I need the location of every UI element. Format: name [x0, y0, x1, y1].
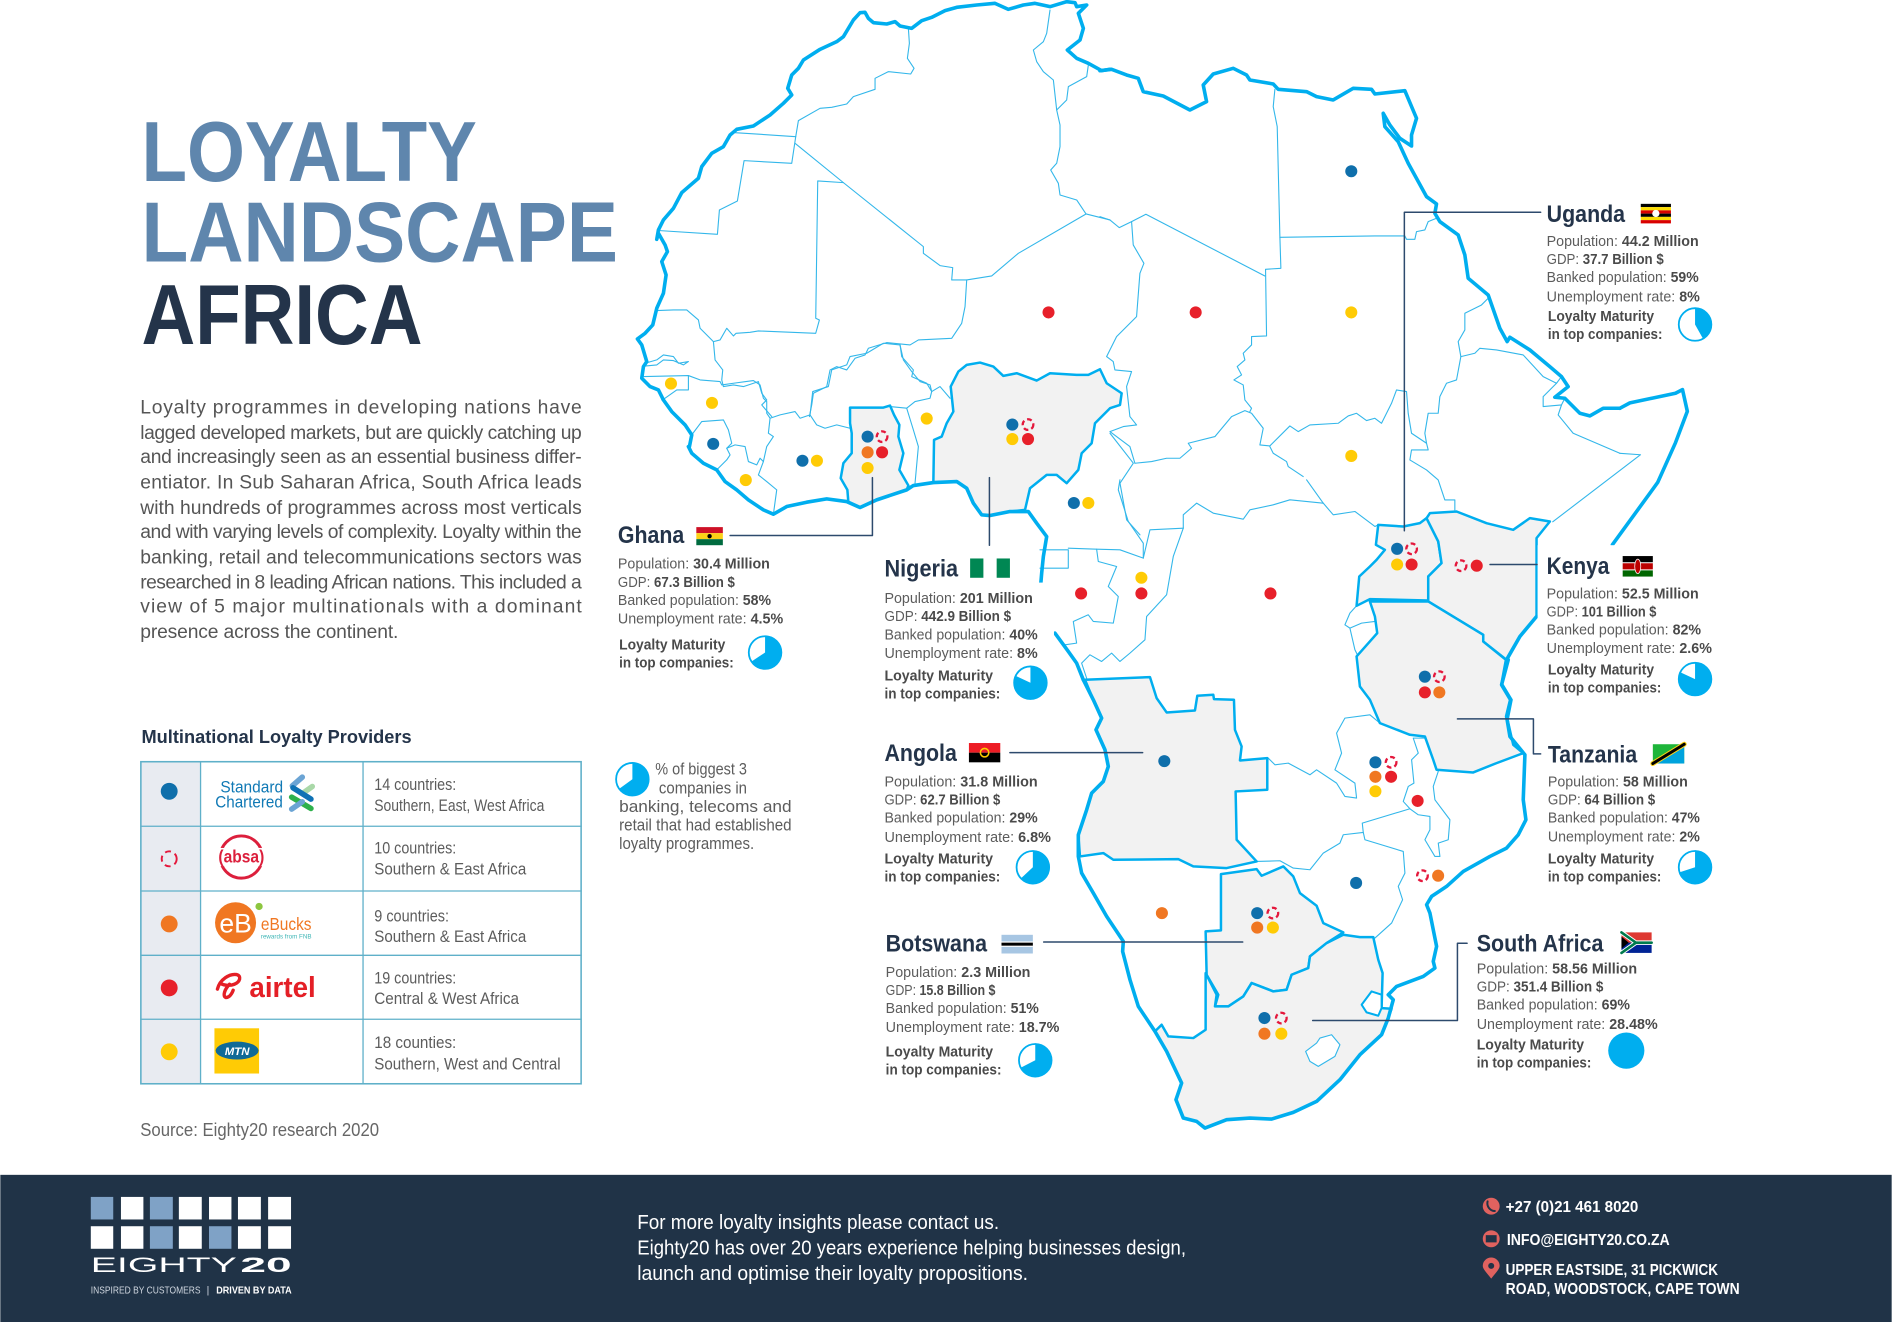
flag: Ghana [696, 527, 723, 545]
Ghana statistics: Population: 30.4 Million [618, 556, 770, 573]
logo: MTN [214, 1028, 259, 1074]
South Africa statistics [1477, 960, 1658, 1033]
logo: Standard Chartered [215, 777, 312, 812]
South Africa pie [1608, 1033, 1644, 1069]
title: LOYALTY [141, 104, 477, 200]
Kenya maturity label [1548, 661, 1661, 696]
Botswana maturity label: Loyalty Maturity [886, 1044, 994, 1061]
Botswana statistics: Banked population: 51% [886, 1000, 1039, 1017]
pie legend: retail that had established [619, 816, 792, 834]
key: eBucks dot [161, 916, 178, 932]
highlighted countries: Uganda, Kenya, Tanzania [1357, 511, 1550, 772]
Tanzania maturity label: Loyalty Maturity [1548, 851, 1655, 868]
providers table [141, 762, 581, 1084]
Ghana statistics: Unemployment rate: 4.5% [618, 611, 783, 628]
contact: address: UPPER EASTSIDE, 31 PICKWICK [1506, 1262, 1719, 1279]
logo: Absa: (absa) [218, 846, 264, 866]
table text: Central & West Africa [374, 990, 520, 1008]
Kenya statistics: GDP: 101 Billion $ [1547, 603, 1657, 620]
South Africa maturity label [1477, 1036, 1591, 1071]
Uganda statistics: Banked population: 59% [1547, 269, 1699, 286]
Ghana statistics [618, 556, 783, 628]
map of Africa [637, 2, 1731, 1128]
Kenya statistics [1547, 585, 1712, 657]
flag: Botswana [1001, 935, 1033, 954]
Nigeria statistics: Population: 201 Million [884, 590, 1033, 607]
title [141, 104, 618, 363]
Airtel markers [876, 306, 1483, 807]
panel: Uganda: Uganda [1547, 201, 1626, 228]
coastline: Mediterranean and Red Sea [1100, 68, 1620, 416]
flag: Angola [969, 743, 1000, 762]
contact: phone: +27 (0)21 461 8020 [1506, 1199, 1639, 1216]
Tanzania statistics: Unemployment rate: 2% [1548, 828, 1700, 845]
table text: 18 counties: [374, 1034, 456, 1052]
Uganda maturity label: in top companies: [1548, 326, 1662, 343]
source: Source: Eighty20 research 2020 [140, 1120, 379, 1140]
highlighted countries: Ghana and Nigeria [841, 363, 1122, 516]
coastline: Horn of Africa [1612, 390, 1687, 545]
flag: Nigeria [970, 558, 1010, 578]
panel: Angola: Angola [884, 740, 957, 767]
provider markers on the map [665, 165, 1483, 1040]
Uganda pie [1679, 308, 1712, 341]
footer message [637, 1212, 1186, 1285]
thin border: Somalia and Ethiopia [1553, 453, 1641, 522]
Ghana statistics: GDP: 67.3 Billion $ [618, 574, 735, 591]
contact: address [1506, 1262, 1740, 1298]
key: Airtel dot [161, 979, 178, 996]
intro paragraph: and with varying levels of complexity. Loyalty within the [140, 522, 582, 543]
Uganda statistics: Population: 44.2 Million [1547, 233, 1699, 250]
footer message: launch and optimise their loyalty propositions. [637, 1263, 1028, 1285]
panel: South Africa: South Africa [1477, 931, 1604, 958]
Botswana maturity label [886, 1044, 1001, 1079]
logo: Absa [215, 836, 268, 878]
highlighted countries: Angola, Botswana, South Africa [1078, 677, 1392, 1128]
Tanzania maturity label [1548, 851, 1661, 886]
pie legend: % of biggest 3 [655, 760, 747, 778]
panel: Botswana [886, 931, 1243, 1079]
logo: eBucks: rewards from FNB [261, 933, 312, 940]
South Africa statistics: Unemployment rate: 28.48% [1477, 1016, 1658, 1033]
table text: Southern & East Africa [374, 860, 527, 878]
South Africa statistics: Banked population: 69% [1477, 997, 1630, 1014]
white label backgrounds clipping the coast [884, 545, 1731, 715]
Nigeria maturity label: in top companies: [884, 685, 1000, 702]
thin borders: north-west [657, 10, 1110, 417]
table text [374, 776, 561, 1073]
Uganda statistics: GDP: 37.7 Billion $ [1547, 251, 1664, 268]
logo: Eighty20: DRIVEN BY DATA [216, 1286, 292, 1297]
coastline: Gabon to Angola [1055, 633, 1083, 680]
Kenya statistics: Unemployment rate: 2.6% [1547, 640, 1712, 657]
South Africa statistics: Population: 58.56 Million [1477, 960, 1637, 977]
contact: address: ROAD, WOODSTOCK, CAPE TOWN [1506, 1281, 1740, 1298]
Ghana maturity label [619, 637, 734, 672]
Absa markers [877, 419, 1466, 1023]
thin borders: West Africa [644, 343, 1140, 535]
panel: Ghana [618, 478, 872, 672]
logo: eBucks: eB [219, 908, 252, 938]
Nigeria statistics: Banked population: 40% [884, 626, 1038, 643]
flag: South Africa [1621, 932, 1652, 953]
icon: email [1483, 1230, 1500, 1247]
icon: location pin [1483, 1257, 1500, 1279]
Nigeria maturity label [884, 667, 1000, 702]
thin borders: north-east [1100, 89, 1620, 510]
pie legend: banking, telecoms and [619, 798, 792, 816]
footer message: For more loyalty insights please contact us. [637, 1212, 999, 1234]
Angola maturity label: Loyalty Maturity [884, 851, 994, 868]
panel: Tanzania [1457, 719, 1712, 886]
Tanzania statistics: GDP: 64 Billion $ [1548, 792, 1656, 809]
table text: 10 countries: [374, 839, 456, 857]
Ghana pie [749, 636, 782, 669]
logo: Eighty20: 20 [240, 1252, 292, 1277]
Angola pie [1017, 850, 1050, 884]
Ghana statistics: Banked population: 58% [618, 592, 771, 609]
intro paragraph: view of 5 major multinationals with a dominant [140, 597, 582, 618]
logo: Eighty20: INSPIRED BY CUSTOMERS [91, 1286, 201, 1297]
Angola statistics: Unemployment rate: 6.8% [884, 829, 1051, 846]
South Africa statistics: GDP: 351.4 Billion $ [1477, 978, 1604, 995]
South Africa maturity label: in top companies: [1477, 1054, 1591, 1071]
Ghana leader line [730, 478, 872, 536]
key: Standard Chartered dot [161, 783, 178, 800]
Ghana maturity label: in top companies: [619, 655, 734, 672]
Standard Chartered markers [707, 165, 1431, 1024]
logo: Standard Chartered: Standard [220, 778, 283, 796]
pie legend: companies in [659, 780, 747, 798]
Kenya pie [1678, 662, 1712, 696]
Angola statistics [884, 773, 1051, 846]
flag: Uganda [1641, 204, 1671, 223]
Botswana maturity label: in top companies: [886, 1062, 1001, 1079]
key: MTN dot [161, 1043, 178, 1060]
Botswana statistics: Population: 2.3 Million [886, 964, 1030, 981]
intro paragraph: lagged developed markets, but are quickly catching up [140, 423, 582, 444]
table text: Southern, West and Central [374, 1055, 561, 1073]
pie legend [616, 760, 792, 853]
panel: Angola [884, 740, 1143, 886]
intro paragraph: presence across the continent. [140, 622, 398, 643]
intro paragraph: researched in 8 leading African nations. This included a [140, 573, 582, 594]
panel: South Africa [1313, 931, 1658, 1071]
title: LANDSCAPE [141, 185, 618, 281]
thin borders: central Africa [1040, 480, 1380, 798]
Kenya maturity label: in top companies: [1548, 679, 1661, 696]
Kenya statistics: Population: 52.5 Million [1547, 585, 1699, 602]
Tanzania pie [1679, 850, 1712, 884]
footer band [0, 1175, 1892, 1322]
logo: Standard Chartered: Chartered [215, 794, 283, 812]
thin borders: southern Africa [1257, 738, 1450, 938]
Nigeria statistics: GDP: 442.9 Billion $ [884, 608, 1012, 625]
MTN markers [665, 306, 1403, 1040]
logo: Airtel [217, 972, 316, 1004]
logo: eBucks: eBucks [261, 914, 312, 934]
table text: Southern & East Africa [374, 928, 527, 946]
intro paragraph: and increasingly seen as an essential business differ- [140, 447, 582, 468]
Botswana statistics: GDP: 15.8 Billion $ [886, 982, 996, 999]
South Africa leader line [1313, 943, 1467, 1020]
Nigeria leader line [988, 478, 990, 545]
Tanzania statistics: Population: 58 Million [1548, 773, 1688, 790]
logo: Eighty20 [91, 1197, 292, 1297]
flag: Kenya [1623, 556, 1653, 577]
Nigeria maturity label: Loyalty Maturity [884, 667, 994, 684]
Nigeria pie [1014, 666, 1047, 700]
panel: Kenya: Kenya [1547, 553, 1610, 580]
Botswana leader line [1044, 941, 1243, 943]
flag: Tanzania [1653, 744, 1684, 764]
table text: Southern, East, West Africa [374, 797, 545, 815]
panel: Uganda [1404, 201, 1712, 531]
Tanzania statistics: Banked population: 47% [1548, 810, 1700, 827]
intro paragraph: banking, retail and telecommunications sectors was [140, 547, 582, 568]
coastline: Gulf of Guinea [688, 447, 1047, 593]
panel: Botswana: Botswana [886, 931, 988, 958]
providers heading: Multinational Loyalty Providers [141, 726, 412, 747]
logo: Airtel: airtel [249, 972, 316, 1004]
panel: Ghana: Ghana [618, 522, 685, 549]
logo: Eighty20: EIGHTY [91, 1252, 237, 1277]
pie legend: loyalty programmes. [619, 835, 754, 853]
Angola leader line [1010, 752, 1143, 754]
Kenya leader line [1490, 564, 1537, 566]
Botswana statistics: Unemployment rate: 18.7% [886, 1019, 1059, 1036]
Ghana maturity label: Loyalty Maturity [619, 637, 726, 654]
logo: eBucks [215, 902, 312, 943]
Tanzania statistics [1548, 773, 1700, 845]
logo: Eighty20: | [207, 1286, 209, 1297]
table text: 19 countries: [374, 970, 456, 988]
Kenya statistics: Banked population: 82% [1547, 621, 1701, 638]
Angola statistics: Population: 31.8 Million [884, 773, 1038, 790]
South Africa maturity label: Loyalty Maturity [1477, 1036, 1585, 1053]
intro paragraph: with hundreds of programmes across most verticals [139, 498, 582, 519]
Tanzania leader line [1457, 719, 1541, 754]
panel: Nigeria: Nigeria [884, 556, 959, 583]
Angola statistics: Banked population: 29% [884, 810, 1038, 827]
contact: email: INFO@EIGHTY20.CO.ZA [1507, 1232, 1670, 1249]
intro paragraph: Loyalty programmes in developing nations have [140, 398, 582, 419]
coastline: Kenya [1507, 616, 1537, 660]
Angola maturity label: in top companies: [884, 869, 1000, 886]
Tanzania maturity label: in top companies: [1548, 869, 1661, 886]
Uganda maturity label: Loyalty Maturity [1548, 308, 1655, 325]
panel: Nigeria [884, 478, 1047, 702]
title: AFRICA [141, 267, 423, 363]
table text: 9 countries: [374, 908, 449, 926]
icon: phone [1483, 1198, 1500, 1215]
Uganda maturity label [1548, 308, 1662, 343]
coastline: southern Africa [1078, 660, 1526, 1128]
intro paragraph: entiator. In Sub Saharan Africa, South Africa leads [140, 473, 582, 494]
coastline [637, 2, 1687, 1128]
Uganda leader line [1404, 212, 1541, 531]
Angola statistics: GDP: 62.7 Billion $ [884, 792, 1001, 809]
intro paragraph [139, 398, 582, 643]
panel: Kenya [1490, 553, 1712, 696]
table text: 14 countries: [374, 776, 456, 794]
Uganda statistics: Unemployment rate: 8% [1547, 289, 1700, 306]
Uganda statistics [1547, 233, 1700, 306]
key: Absa dashed dot [162, 851, 177, 866]
panel: Tanzania: Tanzania [1548, 741, 1638, 768]
Kenya maturity label: Loyalty Maturity [1548, 661, 1655, 678]
coastline: north-west to Guinea [637, 2, 1110, 447]
Botswana pie [1019, 1043, 1052, 1077]
footer message: Eighty20 has over 20 years experience helping businesses design, [637, 1237, 1186, 1259]
Nigeria statistics: Unemployment rate: 8% [884, 645, 1038, 662]
Angola maturity label [884, 851, 1000, 886]
eBucks markers [862, 446, 1445, 1040]
Nigeria statistics [884, 590, 1038, 662]
logo: MTN: MTN [225, 1046, 250, 1058]
Botswana statistics [886, 964, 1059, 1036]
